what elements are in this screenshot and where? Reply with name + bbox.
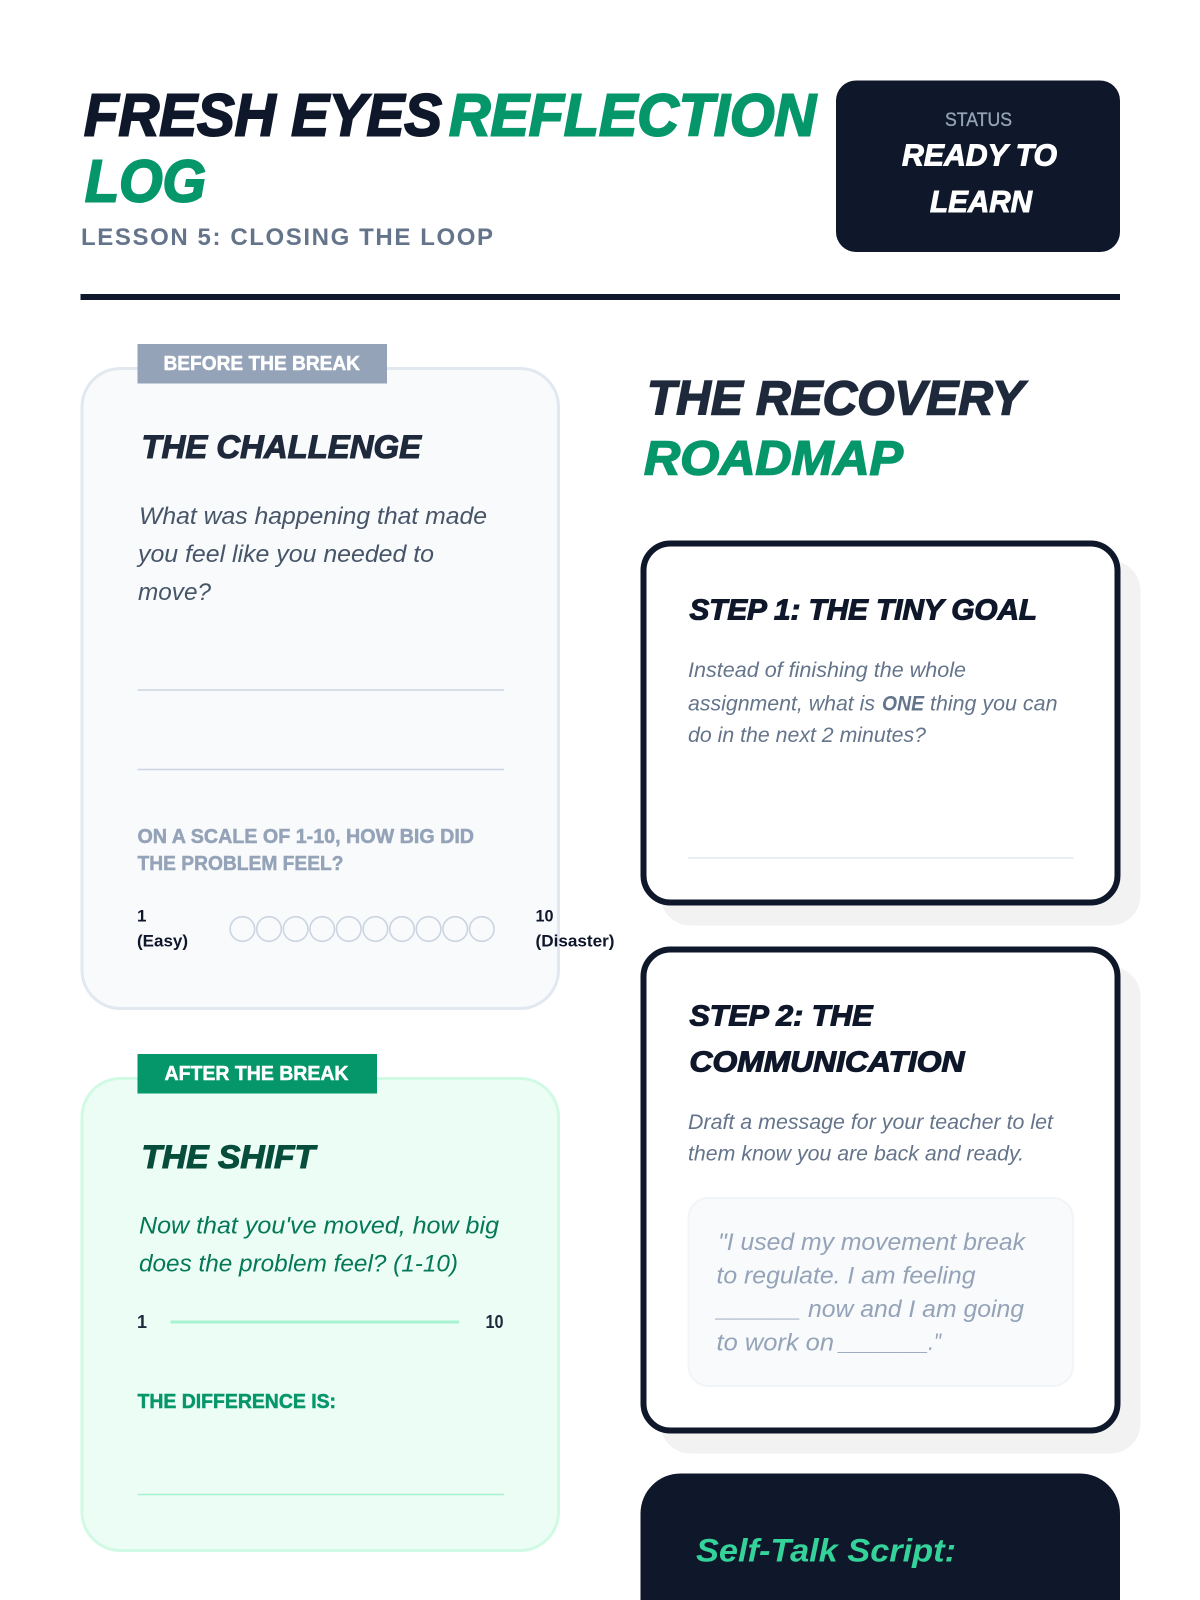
heading: the recovery roadmap: ROADMAP <box>644 432 904 486</box>
message template box: ________." <box>837 1329 942 1356</box>
panel: after the break <box>82 1054 558 1550</box>
heading: step 2: STEP 2: THE <box>690 1000 874 1032</box>
slider 1 to 10 <box>137 1312 504 1332</box>
title <box>84 82 817 214</box>
step 2 description: Draft a message for your teacher to let <box>688 1111 1054 1134</box>
heading: the challenge: THE CHALLENGE <box>142 429 423 465</box>
heading: step 1: STEP 1: THE TINY GOAL <box>690 594 1037 626</box>
scale label: 1 easy <box>137 906 188 950</box>
status box: LEARN <box>930 184 1033 219</box>
scale label: 1 easy: (Easy) <box>137 932 188 950</box>
badge: before the break: BEFORE THE BREAK <box>164 353 361 375</box>
panel: step 2 <box>644 950 1140 1454</box>
scale prompt: THE PROBLEM FEEL? <box>138 852 344 875</box>
writing line <box>138 1494 504 1495</box>
step 2 description <box>688 1111 1054 1166</box>
message template box: to regulate. I am feeling <box>716 1262 976 1290</box>
title: LOG <box>85 148 206 214</box>
heading: the recovery roadmap <box>644 372 1028 486</box>
scale prompt <box>138 825 474 875</box>
heading: self-talk script: Self-Talk Script: <box>696 1532 956 1568</box>
writing lines <box>138 689 504 770</box>
step 1 description: Instead of finishing the whole <box>688 659 966 682</box>
panel: step 1 <box>644 544 1140 926</box>
message template box: to work on <box>716 1330 834 1356</box>
subtitle: LESSON 5: CLOSING THE LOOP <box>81 224 493 251</box>
question text: does the problem feel? (1-10) <box>139 1250 458 1278</box>
message template box: now and I am going <box>808 1296 1025 1323</box>
badge: after the break: AFTER THE BREAK <box>164 1063 349 1085</box>
label: the difference is: THE DIFFERENCE IS: <box>138 1391 336 1413</box>
question text <box>139 1212 500 1278</box>
step 1 description: do in the next 2 minutes? <box>688 724 926 747</box>
panel: before the break <box>82 344 614 1008</box>
scale label: 10 disaster <box>536 906 614 950</box>
step 1 description: thing you can <box>930 692 1058 716</box>
title: REFLECTION <box>449 82 817 148</box>
step 1 description: ONE <box>882 692 925 716</box>
writing line <box>688 857 1074 859</box>
panel: self-talk script <box>640 1474 1120 1600</box>
heading: the shift: THE SHIFT <box>142 1139 318 1175</box>
question text: you feel like you needed to <box>136 541 434 568</box>
badge: after the break <box>138 1054 377 1094</box>
title: FRESH EYES <box>84 82 442 148</box>
step 1 description <box>688 659 1058 747</box>
question text: move? <box>138 579 212 606</box>
scale prompt: ON A SCALE OF 1-10, HOW BIG DID <box>138 825 474 848</box>
badge: before the break <box>138 344 387 384</box>
step 1 description: assignment, what is <box>688 692 876 716</box>
message template box: ________ <box>715 1296 800 1322</box>
message template box <box>688 1198 1073 1386</box>
header <box>81 80 1120 252</box>
status box: READY TO <box>902 138 1057 172</box>
scale label: 1 easy: 1 <box>137 906 146 926</box>
heading: the recovery roadmap: THE RECOVERY <box>647 372 1028 426</box>
question text: What was happening that made <box>139 503 487 530</box>
status box <box>836 80 1120 252</box>
slider 1 to 10: 1 <box>137 1312 147 1332</box>
slider 1 to 10: 10 <box>486 1312 504 1332</box>
heading: step 2: COMMUNICATION <box>690 1046 966 1078</box>
message template box: "I used my movement break <box>718 1229 1027 1256</box>
scale label: 10 disaster: (Disaster) <box>536 932 614 950</box>
rating circles 1 to 10 <box>230 917 494 941</box>
question text <box>136 503 487 606</box>
step 2 description: them know you are back and ready. <box>688 1142 1024 1166</box>
heading: step 2 <box>690 1000 966 1078</box>
scale label: 10 disaster: 10 <box>536 906 554 926</box>
question text: Now that you've moved, how big <box>139 1212 500 1240</box>
status box: STATUS <box>945 110 1012 131</box>
